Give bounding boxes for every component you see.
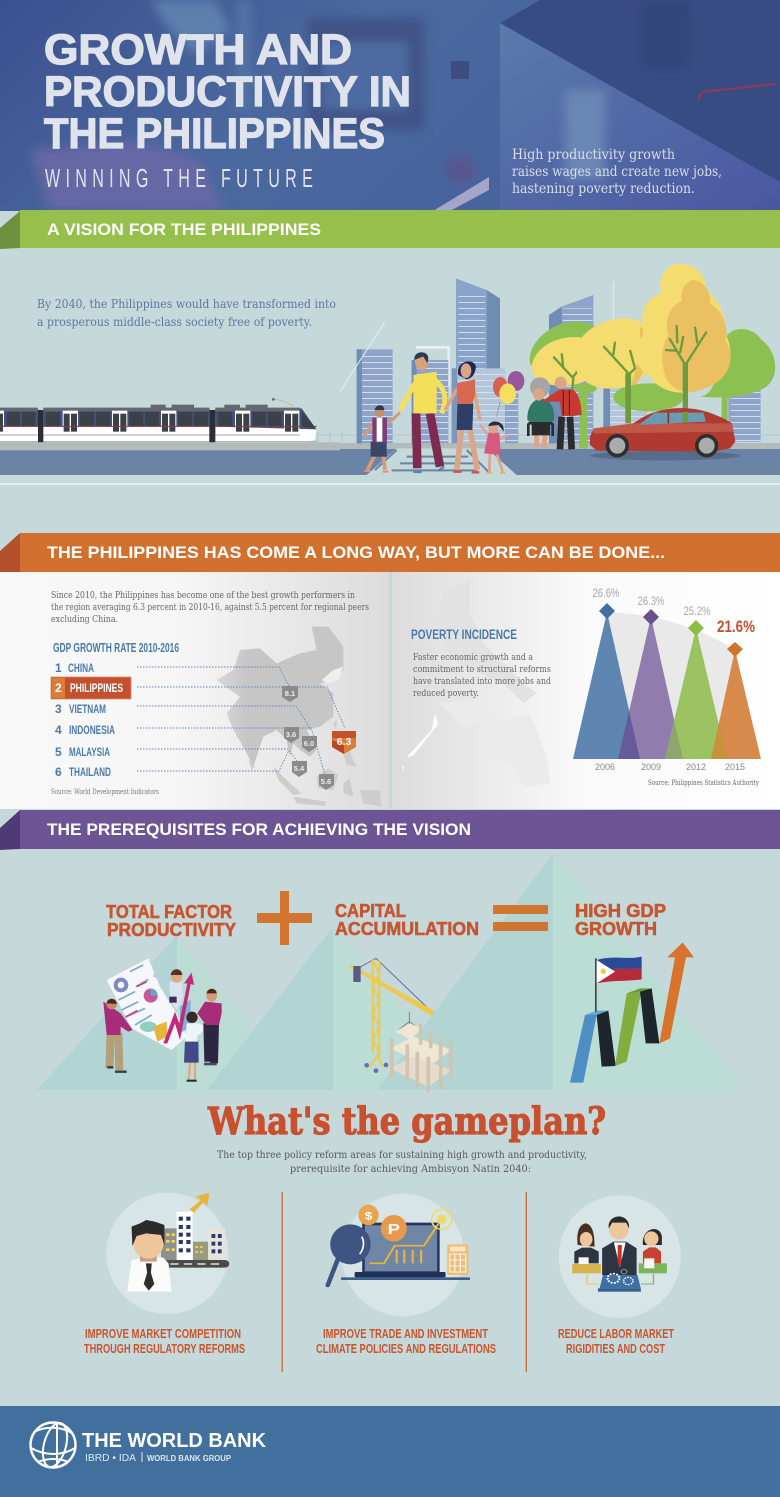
label: market competition: THROUGH REGULATORY REFORMS bbox=[84, 1342, 245, 1356]
map value badges: 5.4 bbox=[294, 764, 305, 773]
text block: poverty summary bbox=[413, 652, 551, 699]
ranking list: PHILIPPINES bbox=[70, 681, 123, 695]
heading: what's the gameplan: What's the gameplan? bbox=[207, 1099, 606, 1143]
background: triangles bbox=[37, 853, 744, 1090]
title: GROWTH AND bbox=[44, 26, 352, 74]
heading: the Philippines has come a long way: THE PHILIPPINES HAS COME A LONG WAY, BUT MORE CAN BE DONE... bbox=[47, 544, 665, 562]
footer bbox=[0, 1406, 780, 1497]
heading: GDP growth rate: GDP GROWTH RATE 2010-2016 bbox=[53, 641, 179, 655]
trees bbox=[530, 264, 775, 448]
panel: header photo background bbox=[0, 0, 780, 211]
label: capital accumulation: ACCUMULATION bbox=[335, 918, 479, 939]
chart: poverty incidence triangles: 26.6% bbox=[592, 586, 620, 600]
label: labor market: RIGIDITIES AND COST bbox=[566, 1342, 665, 1356]
ranking list: 4 bbox=[55, 723, 62, 737]
icon: trade and investment bbox=[328, 1194, 470, 1316]
icon: equals bbox=[493, 905, 548, 931]
logo text: THE WORLD BANK bbox=[82, 1430, 267, 1452]
text block: gameplan intro: The top three policy reform areas for sustaining high growth and productivity, bbox=[217, 1149, 587, 1161]
chart: poverty incidence triangles: 2009 bbox=[641, 762, 661, 772]
source note: GDP: Source: World Development Indicators bbox=[51, 788, 159, 796]
text block: gameplan intro bbox=[217, 1149, 587, 1175]
ranking list: CHINA bbox=[68, 661, 94, 675]
ranking list: MALAYSIA bbox=[69, 745, 110, 759]
illustration: city scene bbox=[340, 264, 775, 475]
label: capital accumulation: CAPITAL bbox=[335, 900, 406, 921]
ranking list: THAILAND bbox=[69, 765, 111, 779]
title: PRODUCTIVITY IN bbox=[44, 68, 411, 116]
ranking list: 6 bbox=[55, 765, 62, 779]
map: Asia bbox=[217, 627, 382, 807]
text block: vision statement: By 2040, the Philippines would have transformed into bbox=[37, 296, 336, 311]
heading: a vision for the Philippines: A VISION FOR THE PHILIPPINES bbox=[47, 220, 321, 239]
map value badges: 5.6 bbox=[321, 777, 331, 786]
label: trade and investment bbox=[316, 1327, 496, 1356]
label: labor market: REDUCE LABOR MARKET bbox=[558, 1327, 674, 1341]
text block: growth summary: excluding China. bbox=[51, 614, 118, 625]
text block: poverty summary: reduced poverty. bbox=[413, 688, 479, 699]
ranking list bbox=[51, 661, 131, 779]
illustration: construction crane bbox=[348, 958, 434, 1073]
text block: header summary bbox=[512, 147, 722, 197]
map value badges: 6.0 bbox=[304, 739, 314, 748]
title: THE PHILIPPINES bbox=[44, 110, 385, 158]
text block: poverty summary: Faster economic growth and a bbox=[413, 652, 533, 663]
map value badges bbox=[282, 686, 356, 790]
label: total factor productivity: PRODUCTIVITY bbox=[107, 919, 237, 940]
text block: vision statement: a prosperous middle-class society free of poverty. bbox=[37, 314, 312, 329]
illustration: growth arrow with flag bbox=[570, 942, 694, 1083]
text block: poverty summary: commitment to structural reforms bbox=[413, 664, 551, 675]
label: trade and investment: CLIMATE POLICIES AND REGULATIONS bbox=[316, 1342, 496, 1356]
road bbox=[0, 432, 780, 485]
car bbox=[590, 408, 740, 460]
text block: header summary: High productivity growth bbox=[512, 147, 675, 163]
chart: poverty incidence triangles bbox=[573, 586, 761, 772]
label: high GDP growth bbox=[575, 900, 666, 939]
label: high GDP growth: HIGH GDP bbox=[575, 900, 666, 921]
icon: world bank globe bbox=[30, 1420, 76, 1470]
text block: poverty summary: have translated into more jobs and bbox=[413, 676, 551, 687]
chart: poverty incidence triangles: 21.6% bbox=[717, 617, 755, 636]
text block: growth summary: Since 2010, the Philippines has become one of the best growth performers in bbox=[51, 590, 355, 601]
text block: growth summary bbox=[51, 590, 369, 625]
ranking list: 5 bbox=[55, 745, 62, 759]
text block: header summary: hastening poverty reduction. bbox=[512, 181, 695, 197]
map value badges: 8.1 bbox=[285, 689, 295, 698]
chart: poverty incidence triangles: 25.2% bbox=[684, 604, 711, 618]
text block: header summary: raises wages and create new jobs, bbox=[512, 164, 722, 180]
person: man at right bbox=[197, 988, 222, 1064]
map value badges: 6.3 bbox=[337, 736, 351, 748]
heading: poverty incidence: POVERTY INCIDENCE bbox=[411, 627, 517, 642]
ranking list: 1 bbox=[55, 661, 62, 675]
person: woman behind report bbox=[153, 969, 183, 1010]
ranking list: 3 bbox=[55, 702, 62, 716]
logo text: WORLD BANK GROUP bbox=[147, 1454, 232, 1463]
panel: poverty incidence bbox=[392, 572, 780, 809]
heading: the Philippines has come a long way bbox=[0, 533, 780, 572]
label: labor market bbox=[558, 1327, 674, 1356]
illustration: building under construction bbox=[390, 1012, 452, 1091]
logo text: IBRD • IDA bbox=[85, 1452, 136, 1464]
divider: right bbox=[526, 1192, 527, 1372]
ranking list: INDONESIA bbox=[69, 723, 115, 737]
ranking list: 2 bbox=[55, 681, 62, 695]
label: high GDP growth: GROWTH bbox=[575, 918, 657, 939]
logo text bbox=[82, 1430, 267, 1464]
label: market competition: IMPROVE MARKET COMPETITION bbox=[85, 1327, 241, 1341]
icon: plus bbox=[257, 891, 312, 945]
icon: trade and investment: P bbox=[388, 1221, 400, 1238]
chart: poverty incidence triangles: 2015 bbox=[725, 762, 745, 772]
label: market competition bbox=[84, 1327, 245, 1356]
heading: a vision for the Philippines bbox=[0, 210, 780, 249]
map value badges: 3.6 bbox=[286, 730, 296, 739]
illustration: train bbox=[0, 398, 340, 450]
heading: the prerequisites bbox=[0, 810, 780, 850]
label: total factor productivity bbox=[106, 901, 237, 940]
icon: market competition bbox=[106, 1193, 229, 1314]
panel: GDP growth rate bbox=[0, 572, 389, 809]
icon: trade and investment: $ bbox=[365, 1210, 373, 1222]
people bbox=[363, 352, 582, 473]
person: woman in front bbox=[184, 1012, 208, 1081]
person: man at left bbox=[103, 999, 133, 1072]
map: Philippines bbox=[402, 580, 550, 787]
title bbox=[44, 26, 411, 158]
text block: vision statement bbox=[37, 296, 336, 329]
chart: poverty incidence triangles: 26.3% bbox=[638, 594, 665, 608]
subtitle: WINNING THE FUTURE bbox=[45, 163, 313, 193]
connector lines bbox=[137, 667, 345, 775]
icon: labor market bbox=[559, 1195, 681, 1318]
ranking list: VIETNAM bbox=[69, 702, 106, 716]
heading: the prerequisites: THE PREREQUISITES FOR ACHIEVING THE VISION bbox=[47, 820, 471, 839]
buildings bbox=[340, 278, 761, 443]
chart: poverty incidence triangles: 2006 bbox=[595, 762, 615, 772]
crosswalk bbox=[367, 448, 517, 475]
text block: growth summary: the region averaging 6.3 percent in 2010-16, against 5.5 percent for regional peers bbox=[51, 602, 369, 613]
text block: gameplan intro: prerequisite for achieving Ambisyon Natin 2040: bbox=[290, 1163, 531, 1175]
chart: poverty incidence triangles: 2012 bbox=[686, 762, 706, 772]
illustration: team with report bbox=[103, 958, 222, 1081]
label: capital accumulation bbox=[335, 900, 479, 939]
label: trade and investment: IMPROVE TRADE AND INVESTMENT bbox=[323, 1327, 488, 1341]
divider: left bbox=[282, 1192, 283, 1372]
label: total factor productivity: TOTAL FACTOR bbox=[106, 901, 232, 922]
